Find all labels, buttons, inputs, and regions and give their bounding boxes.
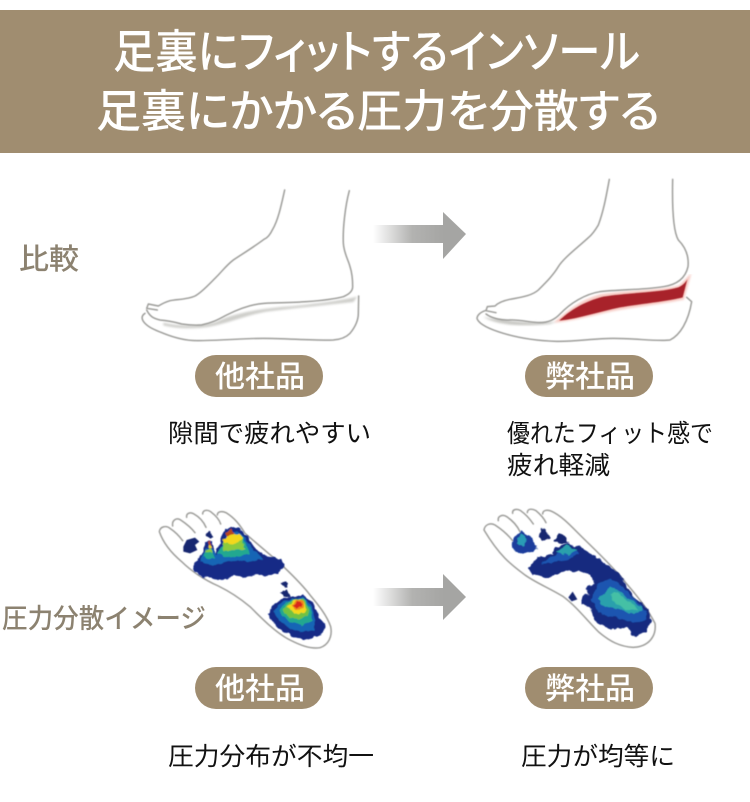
illustration: foot with other brand insole <box>142 190 359 341</box>
heatmap: our brand footprint <box>484 509 655 647</box>
caption: other brand fit: 隙間で疲れやすい <box>168 420 371 448</box>
title banner: 足裏にかかる圧力を分散する <box>96 86 660 137</box>
toe pressure spots <box>512 528 569 554</box>
badge: our brand <box>525 355 653 397</box>
caption: our brand fit: 優れたフィット感で <box>507 420 713 448</box>
caption: even pressure: 圧力が均等に <box>521 743 675 771</box>
title banner: 足裏にフィットするインソール <box>113 26 640 78</box>
caption: uneven pressure: 圧力分布が不均一 <box>168 743 374 771</box>
forefoot pressure zone <box>193 527 284 579</box>
heel pressure zone <box>268 582 325 639</box>
badge: other brand: 他社品 <box>215 361 305 394</box>
sole pressure zone <box>529 543 651 636</box>
arrow: top row <box>373 212 466 259</box>
big toe pressure spot <box>183 538 199 553</box>
title banner <box>0 10 750 153</box>
heatmap: other brand footprint <box>159 510 331 648</box>
caption: our brand fit <box>507 420 713 480</box>
badge: other brand <box>195 355 323 397</box>
badge: other brand, pressure row <box>195 667 323 709</box>
badge: our brand: 弊社品 <box>545 361 635 394</box>
arrow: bottom row <box>373 574 466 620</box>
row label: comparison: 比較 <box>19 243 79 276</box>
badge: other brand, pressure row: 他社品 <box>215 673 305 706</box>
badge: our brand, pressure row <box>525 667 653 709</box>
row label: pressure distribution image: 圧力分散イメージ <box>2 604 206 634</box>
caption: our brand fit: 疲れ軽減 <box>507 452 610 480</box>
badge: our brand, pressure row: 弊社品 <box>545 673 635 706</box>
arch pressure spot <box>568 592 577 601</box>
illustration: foot with our insole <box>477 179 692 341</box>
